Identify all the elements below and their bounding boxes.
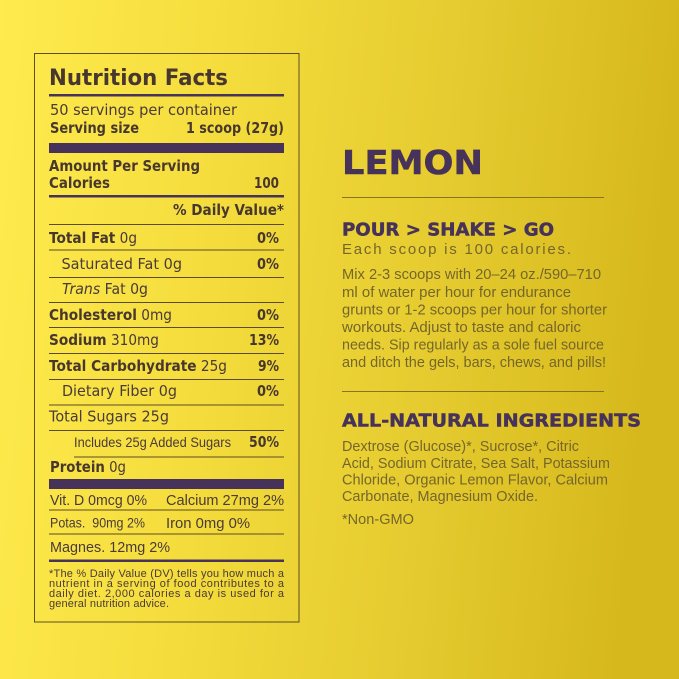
calories (49, 175, 279, 192)
ingredients list: Carbonate, Magnesium Oxide. (342, 489, 538, 505)
row: sodium: Sodium 310mg (49, 332, 159, 349)
directions text: and ditch the gels, bars, chews, and pills! (342, 355, 606, 371)
panel: nutrition facts (34, 54, 299, 622)
row: total carbohydrate: Total Carbohydrate 25g (49, 358, 227, 375)
ingredients list: Chloride, Organic Lemon Flavor, Calcium (342, 472, 608, 488)
panel border (34, 54, 299, 622)
vitamins: vit d and calcium: Vit. D 0mcg 0% (50, 492, 147, 509)
minerals: potassium and iron: Potas. 90mg 2% (50, 514, 145, 530)
ingredients list (342, 439, 610, 505)
daily value header: % Daily Value* (173, 202, 284, 219)
row: total fat: 0% (257, 230, 279, 247)
ingredients list: Acid, Sodium Citrate, Sea Salt, Potassium (342, 456, 610, 472)
row: cholesterol: 0% (257, 307, 279, 324)
calories: 100 (254, 175, 279, 192)
footnote: daily diet. 2,000 calories a day is used for a (49, 588, 285, 600)
row: saturated fat (62, 256, 279, 273)
section: ingredients (342, 412, 641, 528)
row: total fat: Total Fat 0g (49, 230, 137, 247)
amount per serving: Amount Per Serving (49, 158, 200, 175)
minerals: potassium and iron (50, 514, 250, 532)
row: trans fat: Trans Fat 0g (62, 281, 148, 298)
serving size (50, 120, 284, 137)
servings per container: 50 servings per container (50, 102, 238, 119)
non-gmo note: *Non-GMO (342, 512, 414, 528)
row: sodium (49, 332, 279, 349)
directions text: grunts or 1-2 scoops per hour for shorter (342, 302, 607, 318)
directions text: needs. Sip regularly as a sole fuel source (342, 338, 604, 354)
calories: Calories (49, 175, 110, 192)
row: total sugars: Total Sugars 25g (48, 408, 169, 426)
row: saturated fat: 0% (257, 256, 279, 273)
ingredients list: Dextrose (Glucose)*, Sucrose*, Citric (342, 439, 579, 455)
row: cholesterol: Cholesterol 0mg (49, 307, 172, 324)
row: dietary fiber (62, 383, 279, 400)
row: total fat (49, 230, 279, 247)
directions text: workouts. Adjust to taste and caloric (341, 320, 581, 336)
serving size: 1 scoop (27g) (186, 120, 284, 137)
heading: Nutrition Facts: Nutrition Facts (49, 65, 228, 91)
subheading: calories per scoop: Each scoop is 100 calories. (342, 241, 571, 258)
directions text: ml of water per hour for endurance (342, 285, 571, 301)
footnote: nutrient in a serving of food contributes to a (49, 578, 285, 590)
heading: pour shake go: POUR > SHAKE > GO (342, 220, 554, 240)
row: added sugars: Includes 25g Added Sugars (74, 435, 231, 450)
row: cholesterol (49, 307, 279, 324)
row: saturated fat: Saturated Fat 0g (62, 256, 182, 273)
vitamins: vit d and calcium: Calcium 27mg 2% (166, 492, 284, 509)
serving size: Serving size (50, 120, 139, 137)
footnote: general nutrition advice. (49, 598, 169, 610)
row: protein: Protein 0g (50, 459, 126, 476)
directions text: Mix 2-3 scoops with 20–24 oz./590–710 (342, 267, 601, 283)
minerals: potassium and iron: Iron 0mg 0% (166, 515, 250, 532)
vitamins: vit d and calcium (50, 492, 284, 509)
heading: all-natural ingredients: ALL-NATURAL INGREDIENTS (342, 412, 641, 432)
product name: LEMON: LEMON (342, 143, 483, 182)
row: sodium: 13% (249, 332, 279, 349)
footnote (49, 568, 285, 610)
section: directions (341, 220, 607, 371)
minerals: magnesium: Magnes. 12mg 2% (50, 539, 170, 556)
row: total carbohydrate: 9% (258, 358, 279, 375)
row: dietary fiber: Dietary Fiber 0g (62, 383, 177, 400)
row: dietary fiber: 0% (257, 383, 279, 400)
directions text (341, 267, 607, 371)
row: added sugars: 50% (249, 434, 279, 451)
footnote: *The % Daily Value (DV) tells you how much a (49, 568, 285, 580)
